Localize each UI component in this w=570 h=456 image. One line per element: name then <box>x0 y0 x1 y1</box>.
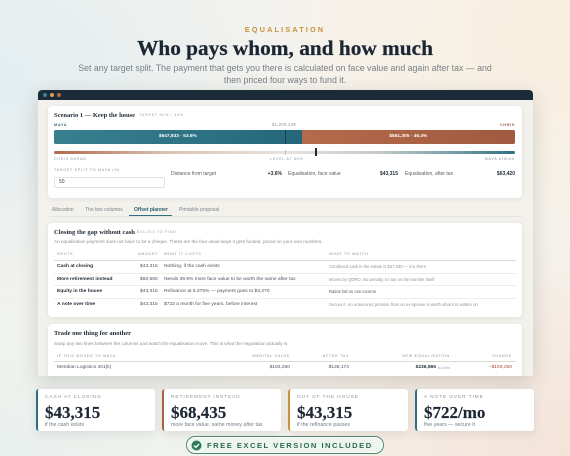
kpi: retirement instead: RETIREMENT INSTEAD <box>171 395 241 400</box>
panel description: An equalisation payment does not have to be a cheque. These are the four usual ways it gets funded, priced on your own numbers. <box>54 239 323 244</box>
kpi: a note over time <box>415 389 534 431</box>
table header: WHAT IT COSTS <box>164 252 202 256</box>
slider marker <box>315 148 317 156</box>
row: more retirement instead: Moves by QDRO. No penalty, no tax on the transfer itself <box>329 276 434 282</box>
label: level at 50: LEVEL AT 50% <box>270 157 303 161</box>
kpi: cash at closing <box>36 389 155 431</box>
tab: allocation: Allocation <box>52 207 74 213</box>
row: more retirement instead <box>54 274 516 286</box>
level tick <box>284 150 286 155</box>
row: more retirement instead: More retirement instead <box>57 276 112 282</box>
table row <box>57 364 512 370</box>
kpi: out of the house: $43,315 <box>297 402 352 422</box>
Maya share: $647,933 · 53.6% <box>159 134 197 139</box>
stat: equalisation after tax: $63,420 <box>497 171 515 177</box>
active tab underline <box>129 215 172 216</box>
kpi: a note over time: five years — secure it <box>424 422 475 428</box>
label: Chris: CHRIS <box>500 122 515 127</box>
kpi: out of the house <box>288 389 408 431</box>
row: equity in the house: Equity in the house <box>57 289 102 294</box>
row: equity in the house: $43,315 <box>140 289 158 294</box>
badge text: FREE EXCEL VERSION INCLUDED <box>207 441 373 450</box>
row: a note over time: $722 a month for five years, before interest <box>164 302 257 306</box>
kpi: cash at closing: if the cash exists <box>45 422 84 428</box>
title: Who pays whom, and how much <box>137 36 433 60</box>
panel heading: Closing the gap without cash <box>54 228 135 236</box>
table header: ROUTE <box>57 252 73 256</box>
row: a note over time: Secure it. An unsecured promise from an ex-spouse is worth what it is written on <box>329 302 478 306</box>
table row: Meridian Logistics 401(k) <box>57 365 111 370</box>
table header: AMOUNT <box>138 252 158 256</box>
kpi: cash at closing: $43,315 <box>45 402 100 422</box>
Chris share: $561,305 · 46.4% <box>389 134 427 139</box>
kpi: retirement instead: $68,435 <box>171 402 226 422</box>
row: more retirement instead: $60,580 <box>140 276 158 282</box>
target input: 50 <box>59 179 65 185</box>
subtitle <box>78 63 492 85</box>
panel description: Swap any two lines between the columns and watch the equalisation move. This is what the negotiation actually is. <box>54 341 289 346</box>
stat: equalisation after tax: Equalisation, after tax <box>405 171 453 177</box>
stat: distance from target <box>171 171 282 177</box>
table row: $138,174 <box>329 365 349 370</box>
subtitle: then priced four ways to fund it. <box>224 75 346 85</box>
icon: check circle <box>192 440 202 450</box>
amount to find tag: $43,315 TO FIND <box>137 230 176 234</box>
row: cash at closing: Combined cash in the estate is $37,530 — it is there <box>329 264 426 269</box>
label: Chris ahead: CHRIS AHEAD <box>54 157 87 161</box>
tabs <box>48 204 522 217</box>
stat: equalisation after tax <box>405 171 515 177</box>
panel: scenario summary <box>48 106 522 198</box>
input label: TARGET SPLIT TO MAYA (%) <box>54 168 120 172</box>
Chris share <box>302 130 515 144</box>
badge: free excel version <box>186 436 384 454</box>
row: a note over time <box>57 302 478 307</box>
table header: NEW EQUALISATION <box>402 354 450 358</box>
stat: distance from target: +3.6% <box>268 171 282 177</box>
table header: IF THIS MOVED TO MAYA <box>57 354 116 358</box>
table row: −$193,250 <box>489 365 512 370</box>
label: Maya ahead: MAYA AHEAD <box>485 157 515 161</box>
table header: WHAT TO WATCH <box>329 252 369 256</box>
tab: the two columns: The two columns <box>85 207 123 213</box>
panel: trade one thing <box>48 324 522 384</box>
table header: MARITAL VALUE <box>252 354 290 358</box>
Maya share <box>54 130 302 144</box>
target input <box>54 177 165 188</box>
target split tag: TARGET 50% / 50% <box>139 113 184 117</box>
kpi: cash at closing: CASH AT CLOSING <box>45 395 102 400</box>
scenario heading: Scenario 1 — Keep the house <box>54 112 135 118</box>
label: Maya: MAYA <box>54 122 67 127</box>
kpi: a note over time: $722/mo <box>424 402 485 422</box>
row: cash at closing: Cash at closing <box>57 264 93 269</box>
window title bar <box>38 90 533 100</box>
row: equity in the house <box>54 286 516 298</box>
row: a note over time: A note over time <box>57 302 95 306</box>
subtitle: Set any target split. The payment that gets you there is calculated on face value and again after tax — and <box>78 63 492 73</box>
row: equity in the house: Ratios fail on one income <box>329 289 376 294</box>
50 percent marker <box>284 130 286 144</box>
panel: closing the gap <box>48 223 522 317</box>
row: equity in the house: Refinance at 6.375% — payment goes to $3,270 <box>164 289 270 294</box>
row: cash at closing: Nothing, if the cash exists <box>164 264 220 269</box>
eyebrow: EQUALISATION <box>245 25 325 34</box>
stat: equalisation face value <box>288 171 398 177</box>
kpi: a note over time: A NOTE OVER TIME <box>424 395 484 400</box>
kpi: out of the house: OUT OF THE HOUSE <box>297 395 359 400</box>
slider track <box>54 151 515 154</box>
row: a note over time: $43,315 <box>140 302 158 306</box>
tab: offset planner active: Offset planner <box>134 207 168 213</box>
table: funding routes <box>54 252 516 307</box>
table row: $236,565 <box>416 365 436 370</box>
tab: printable proposal: Printable proposal <box>179 207 219 213</box>
row: more retirement instead: Needs 39.9% more face value to be worth the same after tax <box>164 276 296 282</box>
table header: AFTER TAX <box>323 354 349 358</box>
table header <box>54 251 516 261</box>
total value: $1,209,248 <box>272 122 296 127</box>
stat: equalisation face value: $43,315 <box>380 171 398 177</box>
kpi: retirement instead <box>162 389 281 431</box>
split bar <box>54 130 515 144</box>
table header: CHANGE <box>492 354 512 358</box>
window control dots <box>43 93 61 97</box>
table row: to Chris <box>438 366 450 370</box>
stat: distance from target: Distance from target <box>171 171 216 177</box>
stat: equalisation face value: Equalisation, face value <box>288 171 341 177</box>
app window <box>38 90 533 376</box>
table row: $193,250 <box>270 365 290 370</box>
table header <box>54 352 516 362</box>
row: cash at closing <box>54 261 516 274</box>
panel heading: Trade one thing for another <box>54 330 131 337</box>
row: cash at closing: $43,315 <box>140 264 158 269</box>
balance slider <box>54 148 515 156</box>
kpi: out of the house: if the refinance passes <box>297 422 350 428</box>
kpi: retirement instead: more face value, same money after tax <box>171 422 263 428</box>
